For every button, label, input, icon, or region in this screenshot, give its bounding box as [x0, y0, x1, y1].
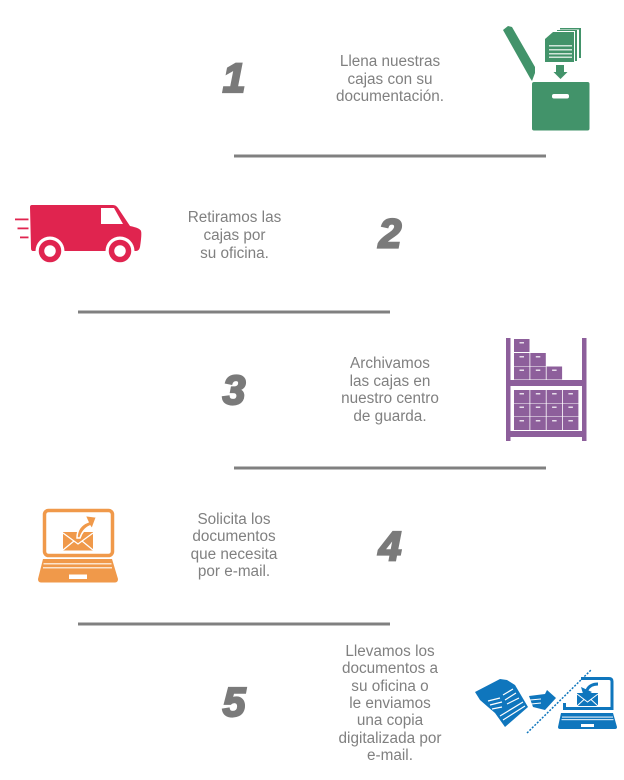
icon: storage shelf with boxes — [506, 338, 586, 441]
step 3 text: las cajas en — [350, 373, 430, 390]
step 3 text: de guarda. — [353, 408, 427, 425]
step 1 text: documentación. — [336, 88, 444, 105]
divider — [78, 622, 390, 626]
icon: delivery van — [15, 205, 141, 260]
step 5 text: su oficina o — [351, 678, 429, 695]
step 2 text: su oficina. — [200, 245, 269, 262]
step 4 text: que necesita — [191, 546, 278, 563]
step 5 number: 5 — [223, 679, 247, 725]
step 5 text: una copia — [357, 712, 424, 729]
step 4 text: Solicita los — [197, 511, 271, 528]
step 1 text: cajas con su — [347, 71, 433, 88]
icon: box with documents — [503, 26, 590, 130]
step 3 number: 3 — [223, 367, 246, 413]
step 3 text: Archivamos — [350, 355, 430, 372]
step 4 text: documentos — [192, 528, 276, 545]
step 1 number: 1 — [223, 55, 245, 101]
step 4 number: 4 — [378, 523, 402, 569]
step 5 text: documentos a — [342, 660, 439, 677]
icon: laptop with outgoing email — [38, 510, 118, 582]
step 5 text: le enviamos — [349, 695, 431, 712]
step 5 text: e-mail. — [367, 747, 413, 764]
step 2 number: 2 — [378, 210, 402, 256]
step 1 text: Llena nuestras — [340, 53, 441, 70]
step 5 text: Llevamos los — [345, 643, 435, 660]
divider — [234, 466, 546, 470]
step 5 text: digitalizada por — [339, 730, 441, 747]
divider — [78, 310, 390, 314]
icon: document handover and digital copy — [475, 670, 617, 733]
step 2 text: cajas por — [203, 227, 266, 244]
divider — [234, 154, 546, 158]
step 4 text: por e-mail. — [198, 563, 270, 580]
step 3 text: nuestro centro — [341, 390, 439, 407]
step 2 text: Retiramos las — [188, 209, 282, 226]
